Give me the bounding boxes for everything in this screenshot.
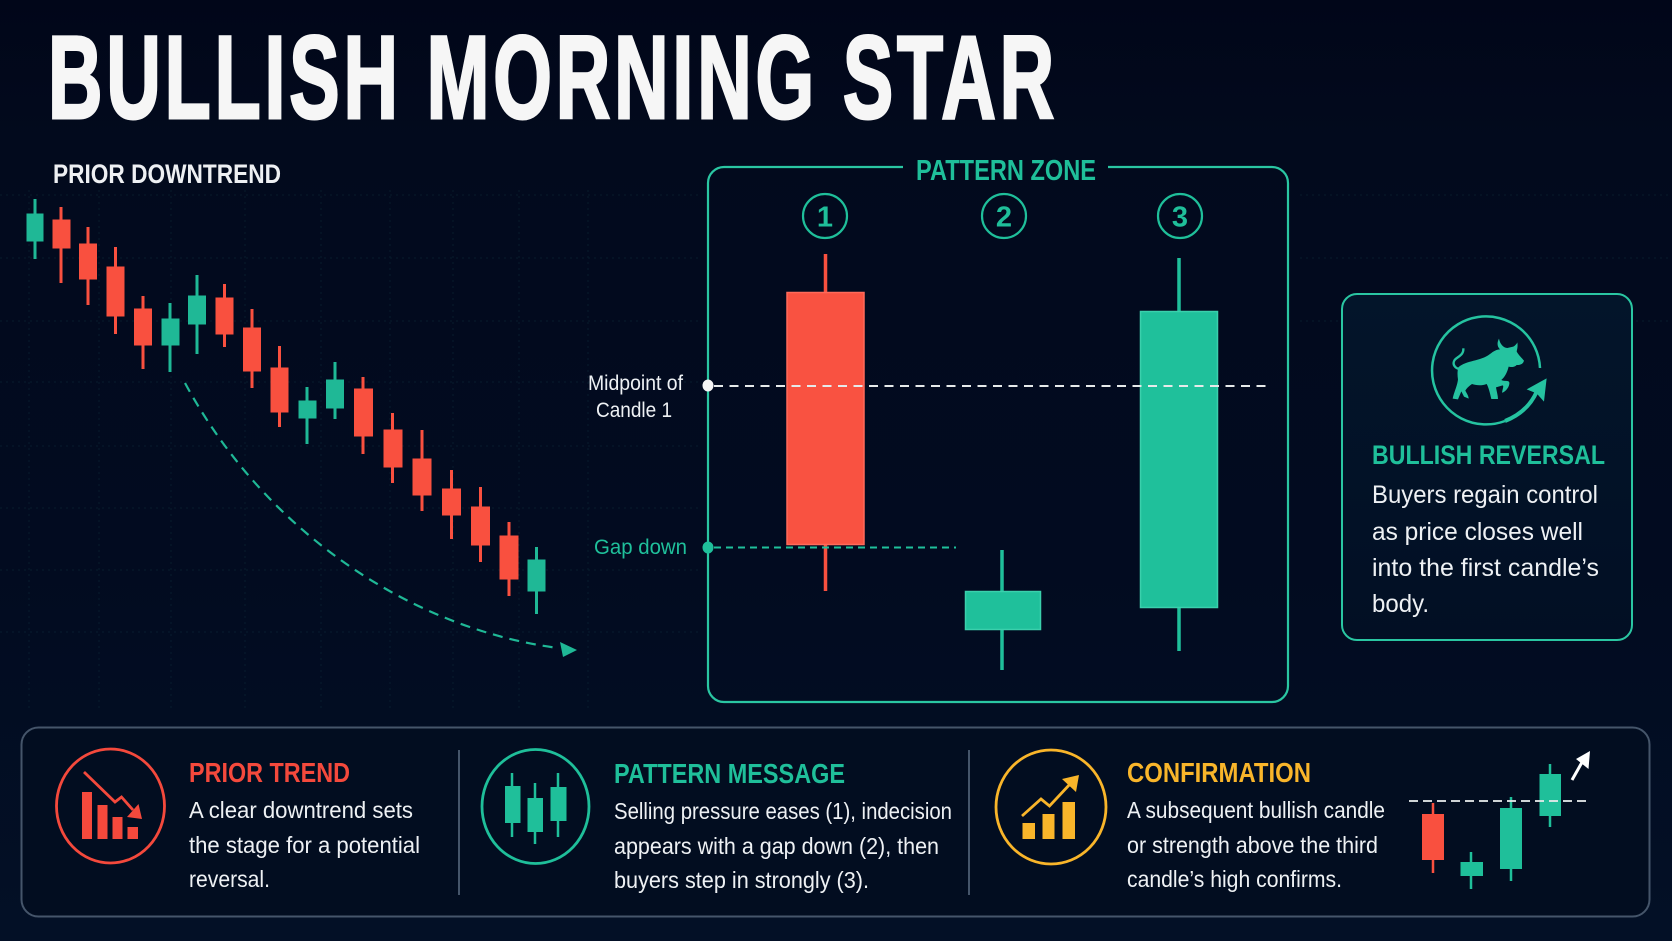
panel: bullish reversal [1342,294,1632,640]
heading: prior trend: PRIOR TREND [189,757,350,788]
number badge 2 [982,194,1026,238]
chart: prior downtrend candles [27,199,545,614]
number badge 1 [803,194,847,238]
midpoint line [702,380,1271,392]
label: midpoint of candle 1: Candle 1 [596,399,672,422]
label: midpoint of candle 1: Midpoint of [588,372,683,395]
title: BULLISH MORNING STAR [48,12,1058,144]
candle 7 [188,275,206,354]
text: pattern message body: appears with a gap down (2), then [614,833,939,859]
icon: falling bars [56,749,164,863]
number badge 2: 2 [996,202,1012,234]
icon: candlesticks [482,750,589,864]
text: confirmation body [1127,797,1385,892]
text: prior trend body [189,797,420,892]
candle 3 [80,227,96,305]
candle 13 [354,377,372,454]
text: pattern message body: buyers step in strongly (3). [614,867,869,893]
candle 17 [472,487,490,562]
candle 2 [53,207,70,283]
text: prior trend body: the stage for a potential [189,832,420,858]
text: bullish reversal body: into the first candle’s [1372,554,1599,582]
arrow: dashed downtrend curve [185,383,577,657]
candle 14 [384,413,402,483]
chart: confirmation mini candles [1409,764,1589,889]
candle 2: small bullish after gap [966,550,1040,670]
candle 10 [271,346,288,427]
candle 1: large bearish [787,254,864,591]
panel: pattern zone [702,155,1288,702]
number badge 3 [1158,194,1202,238]
candle 4 [107,247,124,334]
text: bullish reversal body: body. [1372,590,1429,618]
text: pattern message body [614,798,952,893]
candle 5 [134,296,152,369]
heading: pattern zone: PATTERN ZONE [916,155,1096,187]
candle 18 [500,522,518,596]
heading: bullish reversal: BULLISH REVERSAL [1372,440,1605,470]
text: bullish reversal body [1372,481,1599,618]
text: confirmation body: A subsequent bullish candle [1127,797,1385,823]
text: confirmation body: candle’s high confirms. [1127,866,1342,892]
candle 9 [244,309,260,388]
gap down line [702,542,956,554]
text: pattern message body: Selling pressure eases (1), indecision [614,798,952,824]
label: midpoint of candle 1 [588,372,683,422]
number badge 3: 3 [1172,202,1188,234]
label: gap down: Gap down [594,536,687,559]
heading: pattern message: PATTERN MESSAGE [614,758,845,789]
candle 16 [442,470,460,539]
icon: rising bars [996,750,1106,864]
candle 15 [413,430,431,511]
text: confirmation body: or strength above the third [1127,832,1378,858]
text: prior trend body: reversal. [189,866,270,892]
text: prior trend body: A clear downtrend sets [189,797,413,823]
candle 6 [162,303,179,372]
candle 11 [299,387,316,444]
text: bullish reversal body: as price closes well [1372,518,1583,546]
heading: prior downtrend: PRIOR DOWNTREND [53,159,281,189]
heading: confirmation: CONFIRMATION [1127,757,1311,788]
candle 1 [27,199,43,259]
candle 19 [528,547,545,614]
icon: bull with arrow [1432,316,1547,424]
arrow: white confirmation [1572,751,1590,780]
panel: bottom summary [22,728,1650,916]
candle 8 [216,284,233,347]
text: bullish reversal body: Buyers regain control [1372,481,1598,509]
candle 12 [326,362,344,419]
number badge 1: 1 [817,202,833,234]
candle 3: large bullish [1140,258,1218,651]
